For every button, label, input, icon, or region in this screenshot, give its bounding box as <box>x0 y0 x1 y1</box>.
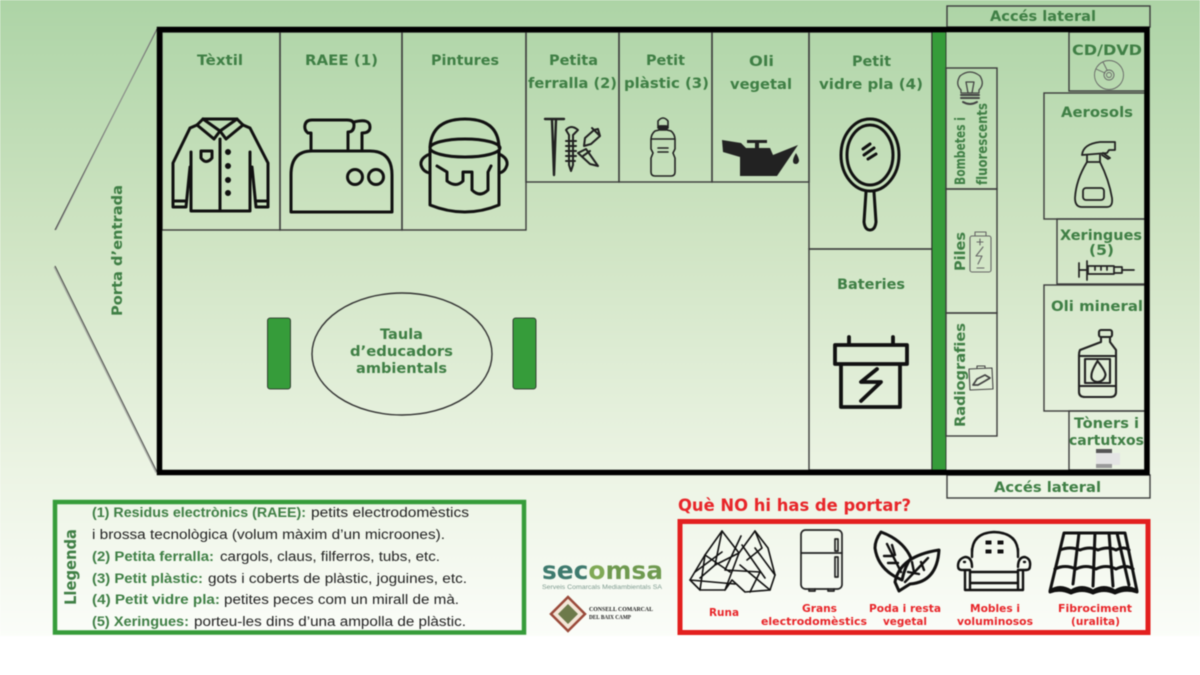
legend entries: porteu-les dins d’una ampolla de plàstic. <box>194 614 466 629</box>
cell: Petit plàstic: plàstic (3) <box>624 76 709 92</box>
cell: Petit vidre pla: Petit <box>852 54 891 70</box>
item: Runa <box>690 531 775 619</box>
cell: Aerosols: Aerosols <box>1061 105 1133 121</box>
lateral access bottom: Accés lateral <box>994 480 1101 496</box>
left green seat <box>268 318 290 389</box>
legend entries: (4) Petit vidre pla: <box>92 592 220 607</box>
icon: oil can <box>722 140 799 176</box>
legend entries: (2) Petita ferralla: <box>92 549 214 564</box>
legend entries: (1) Residus electrònics (RAEE): <box>92 505 306 520</box>
legend entries <box>92 505 469 629</box>
entrance door: Porta d’entrada <box>110 185 126 316</box>
logo: secomsa: Serveis Comarcals Mediambientals SA <box>542 584 663 591</box>
icon: plastic bottle <box>651 118 675 176</box>
cell: Pintures <box>402 32 526 230</box>
cell: Xeringues: (5) <box>1089 243 1114 259</box>
icon: jacket <box>173 119 268 211</box>
icon: x-ray sheet <box>969 366 993 390</box>
item: Mobles i voluminosos: voluminosos <box>957 615 1033 628</box>
cell: Piles <box>946 189 997 313</box>
icon: oil jug <box>1079 330 1116 397</box>
cell: Aerosols <box>1044 93 1145 219</box>
cell: Petita ferralla: Petita <box>549 53 598 69</box>
legend panel <box>55 502 524 632</box>
item: Fibrociment (uralita): Fibrociment <box>1058 602 1132 615</box>
item: Poda i resta vegetal: Poda i resta <box>869 602 941 615</box>
item: Runa: Runa <box>709 606 739 619</box>
cell: Piles: Piles <box>953 232 969 271</box>
cell: Tòners i cartutxos <box>1069 411 1145 470</box>
icon: spray bottle <box>1075 142 1115 207</box>
logo: secomsa: secomsa <box>542 556 663 585</box>
educators table: ambientals <box>356 361 447 377</box>
item: Mobles i voluminosos <box>957 532 1033 628</box>
cell: Oli vegetal: vegetal <box>730 77 792 93</box>
right green seat <box>513 318 536 389</box>
educators table: Taula <box>380 327 423 343</box>
cell: RAEE: RAEE (1) <box>305 53 378 69</box>
legend entries: (3) Petit plàstic: <box>92 571 203 586</box>
cell: Bombetes i fluorescents: fluorescents <box>975 103 991 185</box>
lateral access top <box>947 6 1150 27</box>
cell: CD/DVD <box>1069 32 1145 91</box>
cell: Bateries: Bateries <box>837 277 905 293</box>
legend entries: cargols, claus, filferros, tubs, etc. <box>220 549 440 564</box>
cell: Oli vegetal: Oli <box>749 54 774 70</box>
cell: RAEE <box>280 32 402 230</box>
legend entries: i brossa tecnològica (volum màxim d’un microones). <box>92 527 445 542</box>
item: Fibrociment (uralita) <box>1050 533 1137 628</box>
cell: Petit vidre pla <box>809 32 932 249</box>
item: Poda i resta vegetal: vegetal <box>883 615 927 628</box>
icon: syringe <box>1079 261 1134 280</box>
lateral access top: Accés lateral <box>990 9 1096 25</box>
cell: Tèxtil: Tèxtil <box>197 53 243 69</box>
cell: Radiografies: Radiografies <box>953 323 969 427</box>
cell: Radiografies <box>946 313 997 436</box>
item: Grans electrodomèstics: electrodomèstics <box>761 615 867 628</box>
cell: Tòners i cartutxos: Tòners i <box>1074 416 1139 432</box>
cell: Bateries <box>809 249 932 470</box>
legend entries: (5) Xeringues: <box>92 614 189 629</box>
icon: paint bucket <box>421 119 507 212</box>
icon: hand mirror <box>841 119 899 230</box>
cell: Tèxtil <box>162 32 280 230</box>
cell: Oli mineral <box>1044 285 1145 411</box>
logo: Consell Comarcal del Baix Camp: CONSELL COMARCAL <box>589 606 654 613</box>
cell: Pintures: Pintures <box>431 53 499 69</box>
cell: Bombetes i fluorescents: Bombetes i <box>953 117 969 185</box>
lateral access bottom <box>947 475 1150 498</box>
cell: Petit plàstic: Petit <box>646 53 685 69</box>
cell: CD/DVD: CD/DVD <box>1072 43 1142 59</box>
cell: Petita ferralla: ferralla (2) <box>528 76 617 92</box>
icon: printer <box>1096 449 1120 468</box>
icon: car battery <box>835 337 907 407</box>
item: Poda i resta vegetal <box>869 532 941 628</box>
cell: Oli mineral: Oli mineral <box>1051 299 1143 315</box>
cell: Xeringues <box>1057 219 1145 284</box>
icon: light bulb <box>958 72 982 104</box>
legend heading: Llegenda <box>61 529 80 605</box>
icon: small battery <box>970 232 991 272</box>
item: Mobles i voluminosos: Mobles i <box>970 602 1020 615</box>
panel: forbidden items <box>680 522 1148 632</box>
educators table <box>312 293 492 415</box>
icon: disc <box>1094 60 1124 90</box>
cell: Oli vegetal <box>712 32 809 182</box>
icon: nails and screws <box>545 119 600 175</box>
legend entries: gots i coberts de plàstic, joguines, etc. <box>208 571 467 586</box>
cell: Petita ferralla <box>526 32 619 182</box>
green divider bar <box>932 32 946 470</box>
cell: Petit vidre pla: vidre pla (4) <box>819 77 923 93</box>
cell: Bombetes i fluorescents <box>946 68 997 189</box>
logo: Consell Comarcal del Baix Camp: DEL BAIX CAMP <box>589 614 631 621</box>
cell: Tòners i cartutxos: cartutxos <box>1069 433 1144 449</box>
item: Grans electrodomèstics <box>761 530 867 628</box>
item: Grans electrodomèstics: Grans <box>802 602 837 615</box>
cell: Petit plàstic <box>619 32 712 182</box>
cell: Xeringues: Xeringues <box>1060 228 1142 244</box>
icon: toaster <box>291 120 392 212</box>
legend entries: petites peces com un mirall de mà. <box>224 592 459 607</box>
logo: Consell Comarcal del Baix Camp <box>551 597 654 631</box>
legend entries: petits electrodomèstics <box>311 505 469 520</box>
item: Fibrociment (uralita): (uralita) <box>1071 615 1120 628</box>
entrance door <box>54 29 157 473</box>
main building outline <box>160 30 1147 472</box>
educators table: d’educadors <box>350 344 453 360</box>
heading: what not to bring: Què NO hi has de portar? <box>678 496 911 515</box>
